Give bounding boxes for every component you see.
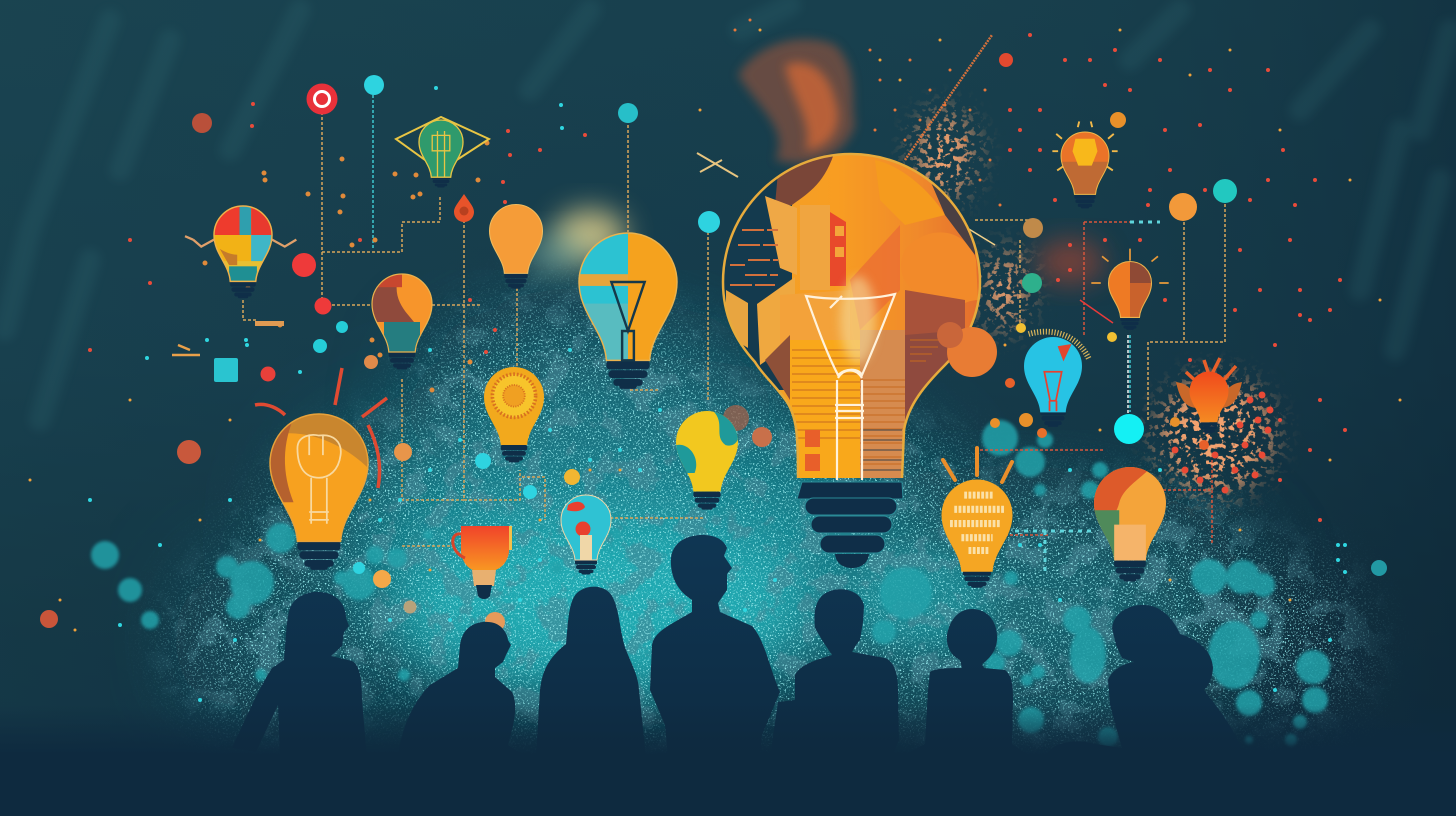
bulb: orange and brown: [372, 274, 432, 369]
person 3: [536, 587, 646, 758]
orange and red paint splatter: [194, 34, 1296, 675]
bulb: globe: [676, 411, 741, 510]
bulb: green eye: [396, 117, 489, 188]
icon: red drop: [454, 194, 474, 222]
bulb: striped orange: [1091, 249, 1169, 330]
teal paint cloud: [89, 268, 1394, 748]
bulb: orange globe: [1094, 467, 1166, 581]
icon: red target: [306, 84, 338, 114]
bulb: small cyan: [561, 495, 611, 574]
audience silhouettes: [232, 535, 1245, 762]
person 2: [398, 622, 530, 760]
person 1: [232, 592, 367, 758]
connector lines: [243, 95, 1225, 575]
person 7: [1045, 605, 1245, 758]
bulb: colour patch: [185, 206, 296, 298]
icon: cyan square: [214, 358, 238, 382]
bulb: cyan with coil: [1024, 332, 1089, 427]
bulb: red with leaves: [1176, 358, 1242, 434]
bulb: top right orange with rays: [1052, 121, 1118, 208]
person 5: [770, 589, 899, 762]
bulb: fist: [270, 414, 368, 570]
dark foreground ground band: [0, 705, 1456, 816]
bulb: coffee cup: [453, 526, 512, 599]
bulb: half cyan half orange: [579, 233, 677, 389]
person 6: [895, 609, 1035, 760]
bulb: golden pattern: [484, 367, 544, 462]
bulb: plain orange: [490, 204, 542, 289]
big central bulb: [720, 150, 1012, 568]
person 4: [650, 535, 780, 758]
scattered coloured dots: [30, 20, 1400, 700]
bulb: yellow with writing: [942, 480, 1012, 588]
